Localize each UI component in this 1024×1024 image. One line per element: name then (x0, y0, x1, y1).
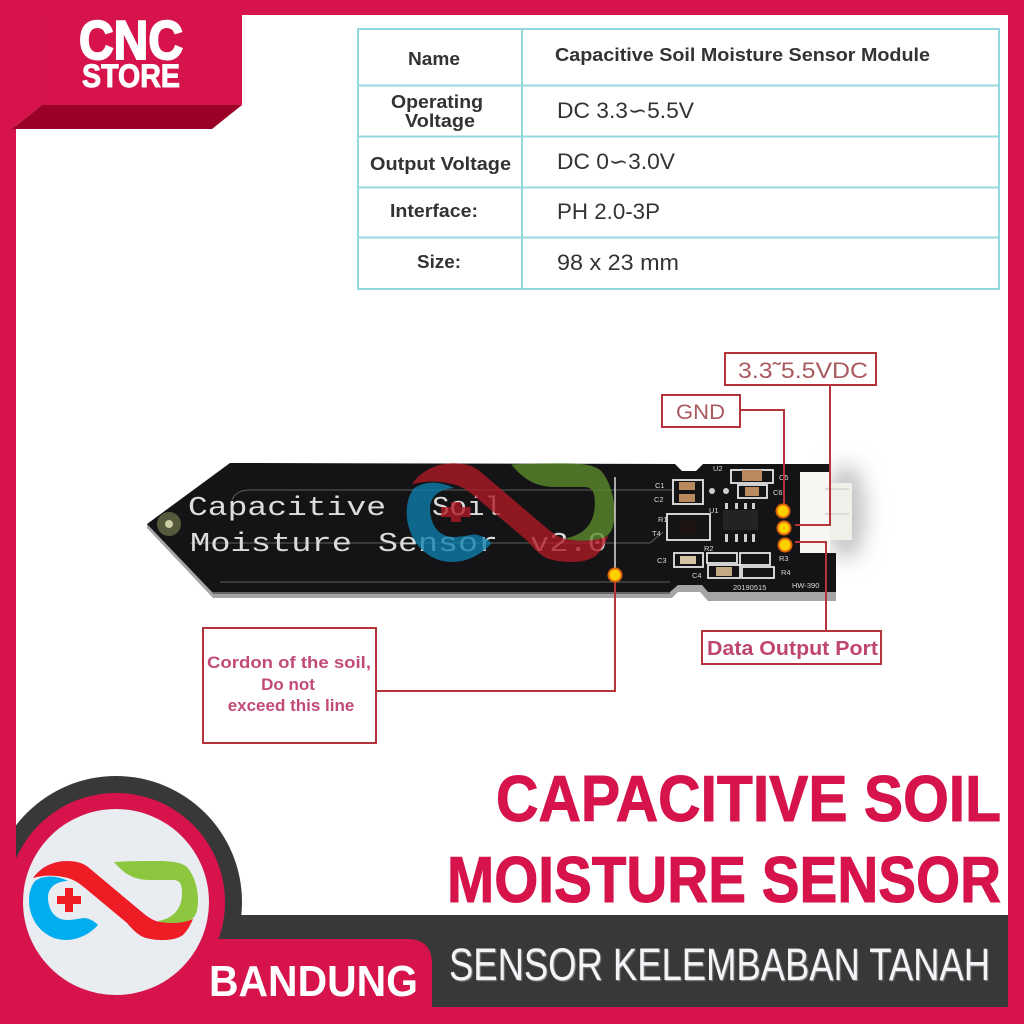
specification table: Operating (391, 91, 483, 112)
specification table: PH 2.0-3P (557, 199, 660, 224)
title (447, 762, 1001, 916)
specification table: Voltage (405, 110, 475, 131)
callout: ground: GND (676, 401, 725, 424)
footer banner (0, 776, 1024, 1024)
specification table: Name (408, 48, 460, 69)
callout: soil line: exceed this line (228, 696, 354, 715)
circuit components: C5 (779, 473, 789, 482)
location label: BANDUNG (209, 957, 418, 1006)
callout: soil line: Cordon of the soil, (207, 653, 371, 672)
logo badge (23, 809, 209, 995)
specification table (358, 29, 999, 289)
mounting hole (157, 512, 181, 536)
marker dots (608, 504, 792, 582)
silkscreen text: Capacitive (188, 494, 386, 524)
specification table: Capacitive Soil Moisture Sensor Module (555, 44, 930, 65)
specification table: DC 3.3∽5.5V (557, 98, 694, 123)
copper traces (190, 490, 672, 582)
circuit components: C2 (654, 495, 664, 504)
circuit components: T4 (652, 529, 661, 538)
circuit components: C4 (692, 571, 702, 580)
specification table: Size: (417, 251, 461, 272)
circuit components: U1 (709, 506, 719, 515)
specification table: Interface: (390, 200, 478, 221)
circuit components: C3 (657, 556, 667, 565)
icon: infinity logo (29, 861, 198, 940)
callout: data output: Data Output Port (707, 638, 878, 660)
circuit components: R1 (658, 515, 668, 524)
circuit components: HW-390 (792, 581, 819, 590)
sensor board (147, 463, 866, 601)
circuit components: U2 (713, 464, 723, 473)
circuit components: R4 (781, 568, 791, 577)
circuit components: C1 (655, 481, 665, 490)
connector (800, 472, 852, 553)
circuit components: 20190515 (733, 583, 766, 592)
brand tab: CNC Store (0, 0, 242, 129)
specification table: 98 x 23 mm (557, 250, 679, 275)
circuit components: C6 (773, 488, 783, 497)
silkscreen text (188, 494, 607, 560)
watermark logo (407, 463, 615, 562)
silkscreen text: Sensor (378, 530, 498, 560)
circuit components: R2 (704, 544, 714, 553)
callout: soil line (203, 477, 615, 743)
circuit components (652, 464, 819, 592)
brand tab: CNC Store: STORE (82, 58, 180, 94)
silkscreen text: v2.0 (530, 530, 607, 560)
callout: soil line: Do not (261, 675, 315, 694)
circuit components: R3 (779, 554, 789, 563)
brand tab: CNC Store: CNC (79, 9, 183, 71)
specification table: Output Voltage (370, 153, 511, 174)
silkscreen text: Moisture (190, 530, 352, 560)
callout: supply voltage: 3.3˜5.5VDC (738, 358, 868, 383)
callout: data output (702, 542, 881, 664)
specification table: DC 0∽3.0V (557, 149, 675, 174)
callout: supply voltage (725, 353, 876, 525)
silkscreen text: Soil (432, 494, 502, 524)
callout: ground (662, 395, 784, 505)
